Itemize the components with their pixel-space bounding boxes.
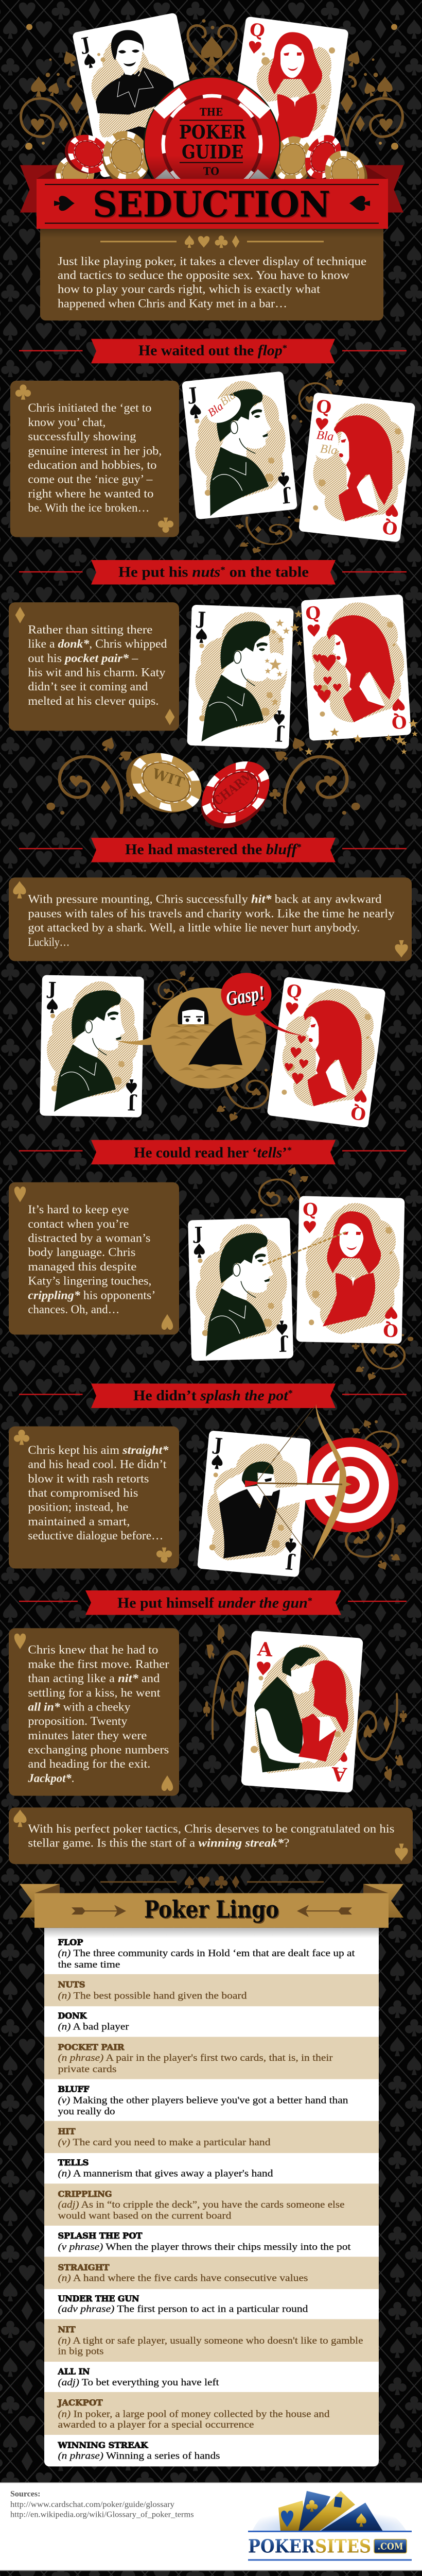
flourish: centre heart spade <box>188 19 236 75</box>
panel: tells text: chances. Oh, and… <box>28 1303 119 1316</box>
panel: under the gun text: all in* with a cheeky <box>28 1701 131 1713</box>
card: queen talking <box>298 392 415 543</box>
panel: flop text <box>10 381 179 537</box>
term: bluff <box>58 2084 348 2117</box>
intro panel <box>40 224 383 320</box>
panel: splash text <box>9 1427 179 1569</box>
term: pocket pair: POCKET PAIR <box>58 2042 125 2052</box>
term: bluff: BLUFF <box>58 2084 90 2094</box>
panel: tells text: body language. Chris <box>28 1246 135 1259</box>
term: splash the pot <box>58 2231 351 2252</box>
chip title text: POKER <box>179 121 246 143</box>
term: all in <box>58 2366 219 2388</box>
card: jack thinking <box>182 371 297 520</box>
term: flop: (n) The three community cards in Hold ‘em that are dealt face up at <box>58 1948 355 1959</box>
term: all in: (adj) To bet everything you have left <box>58 2377 219 2388</box>
divider with suits <box>100 235 324 248</box>
eye contact dashed line <box>262 1232 346 1265</box>
panel: nuts text: his wit and his charm. Katy <box>28 666 166 679</box>
flourishes: ace card <box>203 1620 407 1785</box>
flourishes: tells <box>251 1166 413 1382</box>
panel: splash text: blow it with rash retorts <box>28 1472 149 1485</box>
flourishes: wit and charm <box>46 735 360 815</box>
term: winning streak: WINNING STREAK <box>57 2441 149 2450</box>
archer figure <box>216 1462 344 1558</box>
section heading: tells <box>19 1140 407 1164</box>
term: tells: TELLS <box>58 2158 89 2167</box>
panel: tells text: managed this despite <box>28 1260 136 1273</box>
panel: under the gun text: settling for a kiss, he went <box>28 1686 161 1699</box>
thought bubble: shark story <box>114 988 266 1089</box>
section heading: bluff: * <box>297 842 302 852</box>
panel: splash text: position; instead, he <box>28 1501 128 1514</box>
shark fin <box>188 1018 242 1066</box>
card: queen melted <box>301 595 411 741</box>
ribbon: poker lingo <box>20 1884 403 1928</box>
intro text: happened when Chris and Katy met in a bar… <box>58 297 287 310</box>
term: splash the pot: SPLASH THE POT <box>58 2231 143 2241</box>
section heading: nuts: He put his nuts <box>118 564 219 581</box>
flourishes: flop cards <box>236 369 346 554</box>
term: hit: HIT <box>58 2127 76 2136</box>
panel: under the gun text <box>9 1628 179 1796</box>
term: jackpot <box>57 2398 330 2430</box>
term: donk <box>58 2011 129 2032</box>
panel: flop text: successfully showing <box>28 430 136 443</box>
term: tells: (n) A mannerism that gives away a player's hand <box>58 2168 273 2179</box>
chip title text: THE <box>200 106 223 118</box>
target <box>303 1437 398 1532</box>
panel: splash text: seductive dialogue before… <box>28 1529 163 1542</box>
term: jackpot: JACKPOT <box>57 2398 103 2408</box>
brain with bla bla <box>200 387 248 430</box>
speech bubble: gasp <box>221 973 304 1036</box>
sources <box>10 2490 194 2519</box>
section heading: nuts: on the table <box>225 564 309 581</box>
panel: bluff text: With pressure mounting, Chris successfully hit* back at any awkward <box>28 893 382 906</box>
term: flop: the same time <box>58 1959 120 1970</box>
chip title text <box>179 106 246 177</box>
card: jack watching <box>188 1217 293 1361</box>
chip: wit <box>116 739 212 826</box>
panel: bluff text: got attacked by a shark. Well, a little white lie never hurt anybody. <box>28 921 360 934</box>
section heading: under the gun <box>19 1590 407 1615</box>
panel: tells text: distracted by a woman’s <box>28 1232 150 1244</box>
logo: pokersites.com: POKERSITES <box>248 2536 371 2557</box>
panel: nuts text: didn’t see it coming and <box>28 680 148 693</box>
section heading: flop: He waited out the flop <box>138 343 282 359</box>
panel: closing text: stellar game. Is this the start of a winning streak* ? <box>28 1837 289 1850</box>
chip title text: TO <box>203 164 219 177</box>
section heading: flop <box>19 339 407 363</box>
panel: tells text <box>9 1182 179 1335</box>
speech bubble bla bla <box>310 425 340 461</box>
card: jack archer <box>197 1404 351 1577</box>
card: jack telling a story <box>40 975 144 1117</box>
speech bubble bla bla: Bla <box>316 429 335 444</box>
panel: flop text: be. With the ice broken… <box>28 501 149 514</box>
term: crippling: CRIPPLING <box>58 2189 112 2199</box>
term: pocket pair <box>58 2042 333 2075</box>
flourishes: bluff <box>152 969 277 1123</box>
section heading: splash the pot <box>19 1383 407 1408</box>
sources: Sources: <box>10 2490 40 2499</box>
header ornament: flourishes behind cards <box>21 19 402 150</box>
kissing couple <box>251 1647 348 1772</box>
panel: splash text: maintained a smart, <box>28 1515 130 1528</box>
term: all in: ALL IN <box>58 2366 90 2376</box>
ribbon: poker lingo: Poker Lingo <box>144 1895 279 1923</box>
term: crippling <box>58 2189 345 2222</box>
panel: under the gun text: exchanging phone numbers <box>28 1743 169 1756</box>
section heading: splash the pot: He didn’t splash the pot <box>133 1387 285 1404</box>
card: jack with Chris <box>72 12 205 178</box>
flourishes: target <box>336 1418 407 1571</box>
panel: under the gun text: than acting like a nit* and <box>28 1672 160 1685</box>
panel: under the gun text: Jackpot*. <box>27 1772 74 1785</box>
panel: nuts text <box>9 602 179 731</box>
term: nit: in big pots <box>58 2346 103 2357</box>
section heading: tells: * <box>287 1145 292 1155</box>
panel: bluff text: pauses with tales of his travels and charity work. Like the time he nearly <box>28 907 395 920</box>
panel: tells text: crippling* his opponents’ <box>28 1289 155 1301</box>
Chris in water <box>178 997 208 1024</box>
card: queen flirting <box>296 1196 405 1344</box>
term: nit <box>58 2325 363 2357</box>
chip: charm: CHARM <box>210 768 257 808</box>
stars scattered <box>290 610 418 755</box>
panel: flop text: Chris initiated the ‘get to <box>28 401 151 414</box>
panel: tells text: contact when you’re <box>28 1217 129 1230</box>
speech bubble stars <box>261 618 290 706</box>
big title chip <box>144 77 280 211</box>
chip: wit: WIT <box>150 766 186 791</box>
intro text: and tactics to seduce the opposite sex. You have to know <box>58 269 350 282</box>
arrow: left <box>72 1905 126 1917</box>
term: donk: DONK <box>58 2011 87 2021</box>
term: pocket pair: (n phrase) A pair in the player's first two cards, that is, in their <box>58 2053 333 2063</box>
intro text: Just like playing poker, it takes a clever display of technique <box>58 255 366 268</box>
panel: splash text: and his head cool. He didn’t <box>28 1458 167 1471</box>
panel: closing text <box>9 1807 413 1864</box>
term: donk: (n) A bad player <box>58 2022 129 2032</box>
glossary table <box>44 1928 379 2466</box>
term: flop <box>58 1938 355 1970</box>
panel: splash text: Chris kept his aim straight* <box>28 1444 169 1456</box>
panel: flop text: genuine interest in her job, <box>28 444 162 457</box>
brain with bla bla: Bla <box>218 389 238 408</box>
divider: brown suits <box>100 1876 324 1888</box>
intro text <box>58 255 366 310</box>
flourish: right swirl <box>335 24 402 150</box>
panel: tells text: Katy’s lingering touches, <box>28 1275 151 1287</box>
term: nit: (n) A tight or safe player, usually someone who doesn't like to gamble <box>58 2335 363 2346</box>
term: straight <box>58 2263 308 2283</box>
bow and arrow <box>245 1404 351 1561</box>
flourish: left swirl <box>21 24 89 150</box>
term: flop: FLOP <box>58 1938 83 1947</box>
term: bluff: you really do <box>58 2106 115 2117</box>
panel: nuts text: melted at his clever quips. <box>28 694 159 707</box>
panel: nuts text: like a donk*, Chris whipped <box>28 637 167 650</box>
section heading: bluff <box>19 838 407 862</box>
card: queen with Katy <box>226 16 349 176</box>
term: nuts: (n) The best possible hand given the board <box>58 1990 247 2001</box>
panel: flop text: education and hobbies, to <box>28 459 156 471</box>
panel: flop text: come out the ‘nice guy’ – <box>28 473 153 486</box>
term: jackpot: awarded to a player for a special occurrence <box>58 2419 254 2430</box>
hearts <box>311 653 342 704</box>
panel: flop text: know you’ chat, <box>28 416 106 429</box>
chip title text: GUIDE <box>182 141 243 163</box>
brain with bla bla: Bla <box>205 400 225 419</box>
card: ace with kiss <box>241 1631 363 1793</box>
waves <box>163 1023 265 1079</box>
term: under the gun <box>58 2294 308 2315</box>
term: splash the pot: (v phrase) When the player throws their chips messily into the pot <box>58 2242 351 2252</box>
panel: under the gun text: Chris knew that he had to <box>28 1643 158 1656</box>
section heading: under the gun: He put himself under the gun <box>117 1595 305 1612</box>
card: queen gasping <box>267 977 386 1128</box>
section heading: under the gun: * <box>308 1596 312 1606</box>
term: hit: (v) The card you need to make a particular hand <box>58 2137 271 2148</box>
panel: nuts text: Rather than sitting there <box>28 623 152 636</box>
section heading: flop: * <box>283 343 287 353</box>
term: crippling: would want based on the current board <box>58 2211 232 2222</box>
term: under the gun: UNDER THE GUN <box>58 2294 139 2303</box>
term: nuts <box>58 1980 247 2001</box>
panel: nuts text: out his pocket pair* – <box>28 652 138 665</box>
term: hit <box>58 2127 271 2148</box>
panel: under the gun text: proposition. Twenty <box>28 1715 128 1727</box>
ribbon tails <box>20 165 403 212</box>
logo: pokersites.com: .COM <box>378 2541 403 2552</box>
term: jackpot: (n) In poker, a large pool of money collected by the house and <box>58 2409 330 2419</box>
term: pocket pair: private cards <box>58 2064 117 2075</box>
section heading: bluff: He had mastered the bluff <box>125 841 295 858</box>
panel: under the gun text: minutes later they were <box>28 1729 147 1742</box>
panel: flop text: right where he wanted to <box>28 487 153 500</box>
term: winning streak <box>57 2441 220 2461</box>
chip: charm <box>187 749 284 841</box>
term: tells <box>58 2158 273 2179</box>
term: straight: (n) A hand where the five cards have consecutive values <box>58 2273 308 2283</box>
section heading: nuts: * <box>220 565 225 575</box>
title ribbon: seduction <box>37 179 388 229</box>
arrow: right <box>297 1905 352 1917</box>
sources: http://www.cardschat.com/poker/guide/glossary <box>10 2500 174 2509</box>
card: jack charming <box>187 605 294 749</box>
section heading: nuts <box>19 560 407 585</box>
logo: pokersites.com <box>248 2491 412 2561</box>
panel: splash text: that compromised his <box>28 1486 138 1499</box>
panel: tells text: It’s hard to keep eye <box>28 1203 129 1216</box>
sources: http://en.wikipedia.org/wiki/Glossary_of_poker_terms <box>10 2510 194 2519</box>
panel: under the gun text: make the first move. Rather <box>28 1657 169 1670</box>
panel: closing text: With his perfect poker tactics, Chris deserves to be congratulated on his <box>28 1822 394 1835</box>
term: nuts: NUTS <box>58 1980 85 1990</box>
section heading: tells: He could read her ‘tells’ <box>134 1144 287 1161</box>
term: under the gun: (adv phrase) The first person to act in a particular round <box>58 2304 308 2315</box>
intro text: how to play your cards right, which is exactly what <box>58 283 320 296</box>
panel: bluff text <box>9 877 412 961</box>
speech bubble: gasp: Gasp! <box>224 981 267 1010</box>
speech bubble bla bla: Bla <box>320 442 338 457</box>
term: winning streak: (n phrase) Winning a series of hands <box>58 2451 220 2461</box>
section heading: splash the pot: * <box>288 1388 293 1398</box>
term: bluff: (v) Making the other players believe you've got a better hand than <box>58 2095 348 2106</box>
term: nit: NIT <box>58 2325 76 2334</box>
poker chips pile <box>49 123 374 204</box>
panel: bluff text: Luckily… <box>28 936 69 948</box>
title ribbon: seduction: SEDUCTION <box>93 184 330 225</box>
term: straight: STRAIGHT <box>58 2263 110 2273</box>
footer band <box>0 2482 422 2571</box>
panel: under the gun text: and heading for the exit. <box>28 1757 150 1770</box>
term: crippling: (adj) As in “to cripple the deck”, you have the cards someone else <box>58 2199 345 2210</box>
